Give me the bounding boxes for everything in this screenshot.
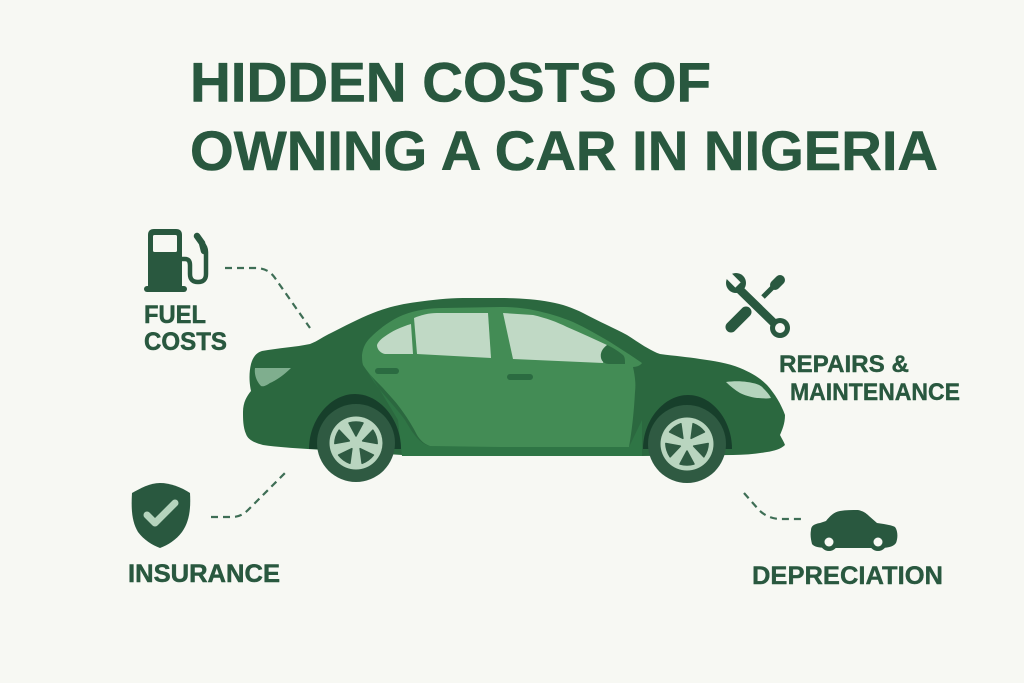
- front wheel arch: [643, 395, 732, 449]
- rear side window: [377, 324, 413, 354]
- icon: shield with check: [132, 483, 190, 548]
- headlight: [726, 381, 771, 398]
- front wheel: [648, 405, 726, 483]
- label: depreciation: DEPRECIATION: [752, 562, 943, 590]
- icon: small car: [811, 510, 897, 551]
- car body: [243, 298, 785, 456]
- icon: fuel pump: [144, 229, 206, 292]
- label: repairs and maintenance: MAINTENANCE: [790, 379, 960, 406]
- label: fuel costs: [144, 301, 227, 356]
- connector: depreciation: [744, 493, 801, 519]
- rear wheel arch: [309, 394, 401, 449]
- tail light: [255, 368, 291, 386]
- title: [190, 50, 938, 182]
- car illustration: [243, 298, 785, 483]
- rear door window: [414, 313, 491, 358]
- front door handle: [507, 374, 533, 380]
- front door window: [503, 313, 607, 363]
- label: repairs and maintenance: REPAIRS &: [779, 351, 909, 378]
- title: HIDDEN COSTS OF: [190, 50, 711, 114]
- icon: wrench and screwdriver: [725, 272, 790, 338]
- rear door handle: [375, 368, 399, 374]
- title: OWNING A CAR IN NIGERIA: [190, 119, 938, 182]
- connector: fuel: [225, 268, 310, 328]
- label: insurance: INSURANCE: [128, 560, 280, 588]
- label: repairs and maintenance: [779, 351, 960, 406]
- side mirror: [601, 345, 625, 364]
- door panel: [362, 307, 642, 447]
- label: fuel costs: COSTS: [144, 328, 227, 356]
- connector: insurance: [211, 472, 286, 517]
- label: fuel costs: FUEL: [144, 301, 206, 329]
- sill: [363, 362, 642, 456]
- rear wheel: [317, 404, 395, 482]
